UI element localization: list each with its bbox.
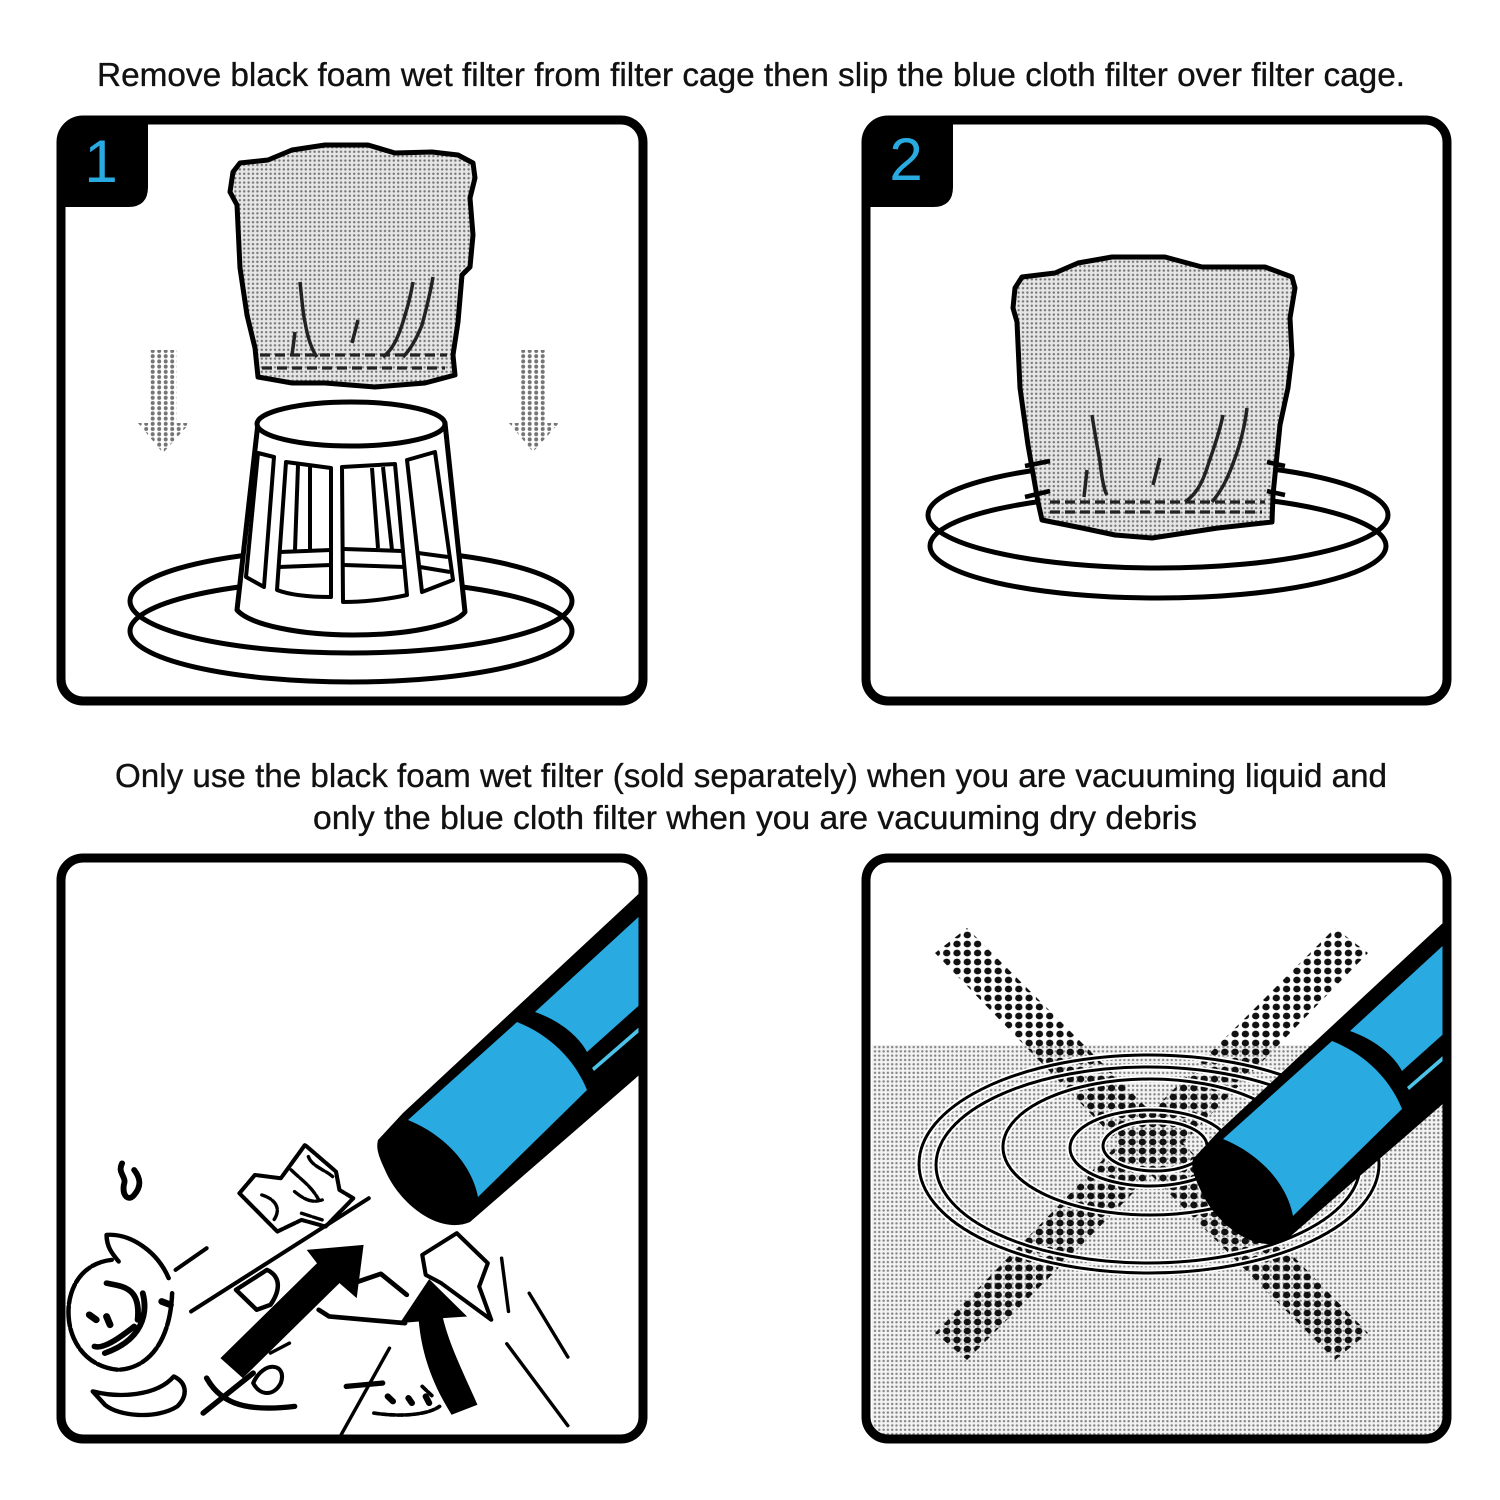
panel: do not use on liquid: [866, 858, 1460, 1439]
panel frame: [61, 858, 643, 1439]
panel: step 2: [866, 120, 1447, 701]
panel frame: [866, 858, 1447, 1439]
instruction heading: middle: only the blue cloth filter when you are vacuuming dry debris: [313, 799, 1197, 836]
panel frame: [866, 120, 1447, 701]
icon: debris and suction arrows: [68, 1145, 568, 1435]
icon: filter cage: [237, 402, 465, 635]
instruction heading: middle: Only use the black foam wet filter (sold separately) when you are vacuuming liquid and: [115, 757, 1387, 794]
instruction heading: middle: [115, 757, 1387, 836]
number badge 2: 2: [889, 126, 923, 193]
instruction heading: top: Remove black foam wet filter from filter cage then slip the blue cloth filter over filter cage.: [97, 56, 1405, 93]
icon: vacuum hose: [377, 888, 645, 1225]
panel: step 1: [61, 120, 643, 701]
icon: dotted prohibition X: [935, 928, 1368, 1360]
icon: liquid puddle ripples: [919, 1055, 1379, 1273]
icon: blue cloth filter bag: [230, 145, 475, 387]
number badge 1: [61, 120, 148, 207]
icon: lid rings: [928, 462, 1388, 598]
panel: dry debris use: [61, 858, 645, 1439]
panel frame: [61, 120, 643, 701]
icon: filter installed on cage: [1013, 257, 1295, 538]
icon: lid rings: [130, 549, 572, 682]
arrow: right down: [509, 350, 559, 452]
arrow: left down: [138, 350, 190, 453]
number badge 1: 1: [84, 128, 118, 195]
number badge 2: [866, 120, 953, 207]
wet floor texture: [872, 1045, 1445, 1435]
icon: vacuum hose: [1192, 923, 1442, 1244]
